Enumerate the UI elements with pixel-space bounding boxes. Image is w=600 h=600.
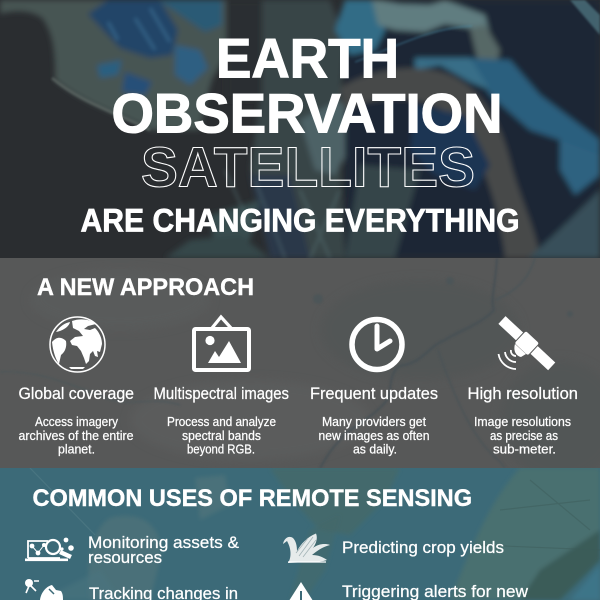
text: monitoring assets: Monitoring assets & — [88, 533, 240, 552]
text: global coverage description — [18, 415, 134, 456]
icon: monitoring assets — [25, 538, 74, 561]
heading: a new approach: A NEW APPROACH — [37, 274, 254, 301]
icon: clock — [352, 320, 402, 370]
text: global coverage description: Access imagery — [35, 415, 119, 429]
icon: satellite — [496, 314, 557, 372]
panel: hero header — [0, 0, 600, 258]
text: predicting crop yields: Predicting crop yields — [342, 538, 504, 557]
panel: common uses — [0, 468, 600, 600]
text: high resolution description: Image resolutions — [474, 415, 571, 429]
text: frequent updates description: new images as often — [318, 429, 430, 443]
text: monitoring assets — [88, 533, 240, 567]
title: satellites outline: SATELLITES — [141, 136, 475, 200]
label: high resolution: High resolution — [468, 384, 578, 403]
icon: picture frame — [194, 317, 249, 370]
text: multispectral description: Process and analyze — [167, 415, 276, 429]
subtitle: ARE CHANGING EVERYTHING — [80, 202, 520, 238]
label: multispectral images: Multispectral images — [154, 384, 289, 403]
icon: globe — [50, 317, 105, 372]
text: multispectral description: spectral bands — [182, 429, 261, 443]
heading: common uses: COMMON USES OF REMOTE SENSING — [32, 485, 472, 512]
icon: alert triangle — [287, 582, 315, 600]
text: frequent updates description: Many providers get — [322, 415, 427, 429]
text: frequent updates description — [318, 415, 430, 456]
text: multispectral description — [167, 415, 276, 456]
text: high resolution description: sub-meter. — [493, 442, 556, 456]
label: global coverage: Global coverage — [18, 384, 134, 403]
text: monitoring assets: resources — [88, 548, 162, 567]
icon: tracking changes — [25, 579, 63, 600]
text: high resolution description: as precise as — [490, 429, 558, 443]
label: frequent updates: Frequent updates — [310, 384, 438, 403]
text: multispectral description: beyond RGB. — [187, 442, 255, 456]
title: earth: EARTH — [216, 26, 399, 90]
text: high resolution description — [474, 415, 571, 456]
text: global coverage description: planet. — [58, 442, 95, 456]
text: frequent updates description: as daily. — [353, 442, 397, 456]
title: observation: OBSERVATION — [112, 82, 502, 144]
panel: a new approach — [0, 258, 600, 480]
icon: corn — [283, 534, 330, 563]
text: global coverage description: archives of the entire — [18, 429, 134, 443]
